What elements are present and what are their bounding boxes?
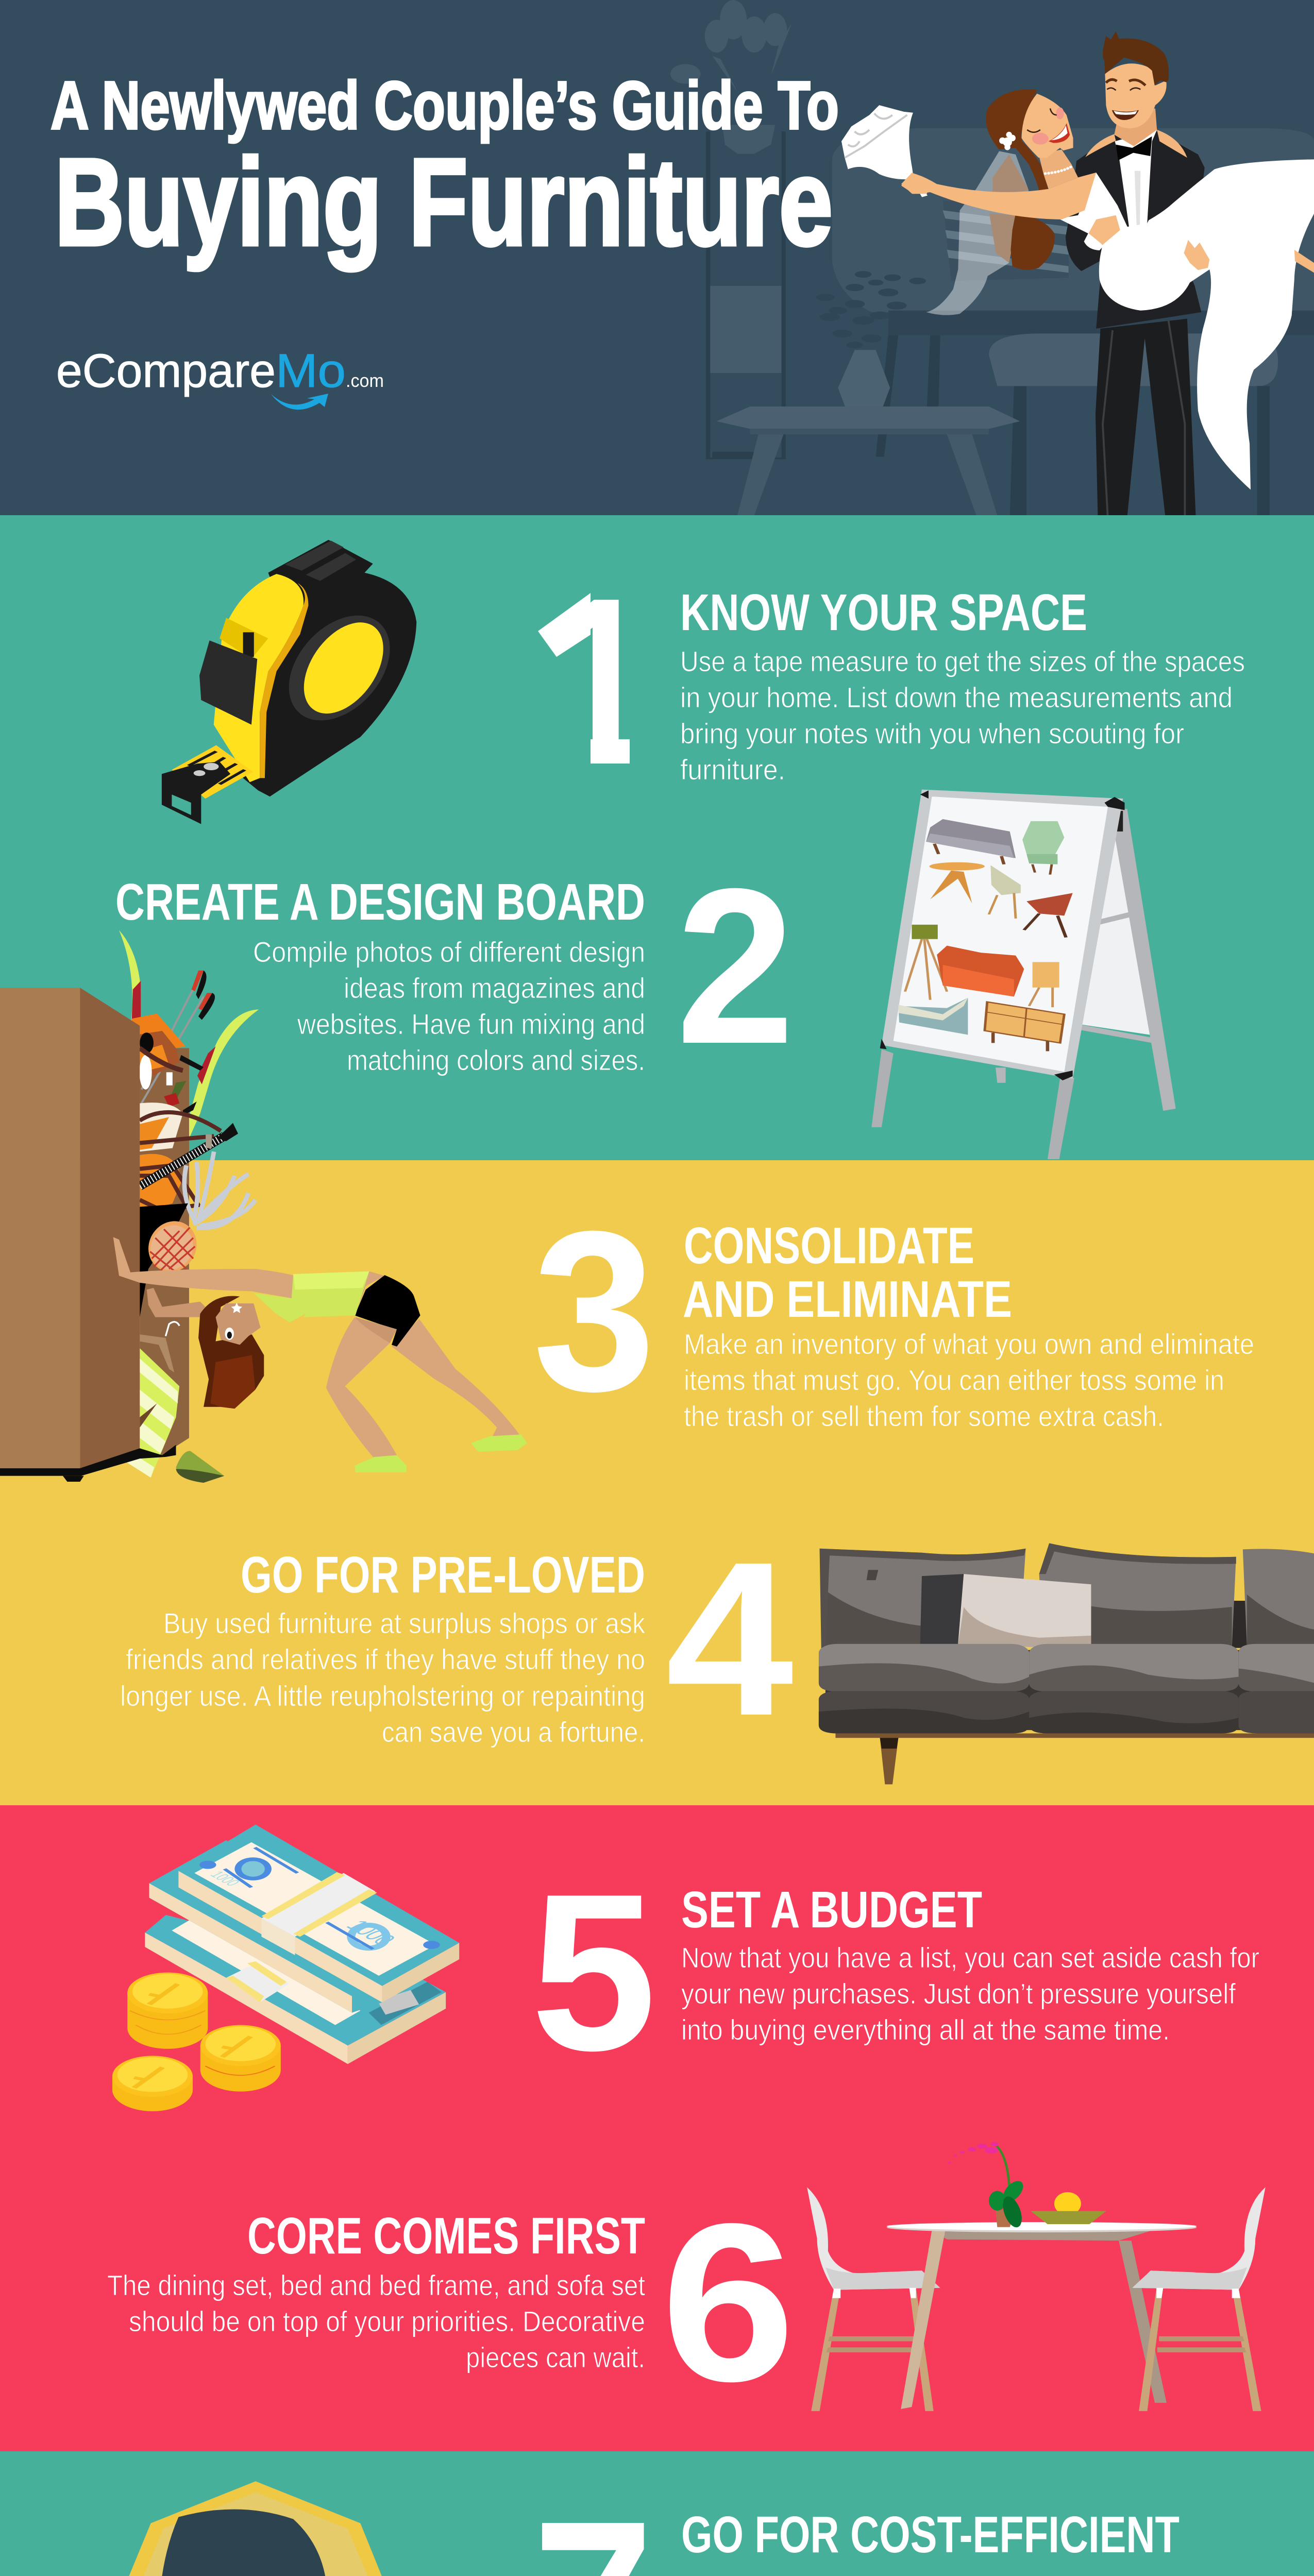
dress [1058,159,1314,489]
text: step 6 body: The dining set, bed and bed frame, and sofa set [107,2269,645,2301]
text: step 1 body: Use a tape measure to get the sizes of the spaces [680,645,1245,677]
heading: create a design board: CREATE A DESIGN BOARD [115,873,645,931]
illustration: faint living room background [670,0,1314,515]
logo: eCompareMo.com: Mo [276,345,346,397]
text: step 2 body: websites. Have fun mixing and [297,1008,645,1040]
text: step 1 body [680,645,1245,786]
bride face [1021,94,1073,158]
text: step 2 body: Compile photos of different design [253,936,645,968]
bride arm and neck [1039,149,1078,189]
panel: steps 1 and 2 [0,515,1314,1160]
wardrobe door [140,1048,189,1466]
heading: core comes first: CORE COMES FIRST [247,2207,645,2265]
number 2: 2 [676,843,795,1090]
text: step 4 body: longer use. A little reupholstering or repainting [120,1680,645,1712]
panel: steps 3 and 4 [0,1160,1314,1805]
bride arm over groom shoulder [1085,130,1187,158]
green shoe on floor [176,1451,224,1483]
logo: eCompareMo.com [56,345,384,410]
woman: shoes [355,1434,527,1472]
panel: header [0,0,1314,515]
panel: steps 7 and 8 [0,2451,1314,2576]
clutter: skis [119,930,259,1160]
illustration: design board [871,790,1176,1159]
shirt and bow tie [1115,130,1157,227]
text: step 5 body: into buying everything all at the same time. [681,2013,1170,2046]
panel: steps 5 and 6 [0,1805,1314,2451]
clutter: guitar [140,1123,238,1186]
clutter: clothing and racket [139,1204,206,1317]
text: step 4 body: can save you a fortune. [382,1716,645,1748]
icon: tape measure [162,540,416,824]
heading: know your space: KNOW YOUR SPACE [680,584,1087,641]
clutter: mop [184,1151,256,1228]
heading: go for pre-loved: GO FOR PRE-LOVED [241,1546,645,1604]
illustration: dining set [807,2142,1266,2411]
illustration: groom carrying bride [841,31,1314,515]
text: step 2 body: matching colors and sizes. [347,1044,645,1076]
heading: go for cost-efficient: GO FOR COST-EFFICIENT [681,2506,1180,2564]
wardrobe body [0,988,176,1482]
text: step 6 body: pieces can wait. [466,2341,645,2374]
groom hands and bride leg [1084,233,1104,250]
text: step 3 body: items that must go. You can either toss some in [684,1364,1224,1396]
clutter: ski poles [142,971,215,1103]
clutter: lower hanger [140,1334,174,1372]
text: step 2 body: ideas from magazines and [344,972,645,1004]
heading: consolidate and eliminate: AND ELIMINATE [683,1270,1012,1328]
text: step 1 body: bring your notes with you when scouting for [680,717,1184,750]
illustration: armchair on yellow octagon [107,2481,403,2576]
heading: consolidate and eliminate [683,1217,1012,1328]
groom trousers [1096,319,1195,515]
clutter: cuckoo clock and hangers [131,1013,221,1217]
title: line 2: Buying Furniture [55,133,833,271]
text: step 3 body: Make an inventory of what you own and eliminate [684,1328,1254,1360]
number 1: 1 [548,548,654,814]
text: step 1 body: in your home. List down the measurements and [680,681,1233,714]
illustration: cash stacks and coins: 1000 [206,1869,244,1888]
bouquet [841,105,914,179]
illustration: cash stacks and coins: 1000 [340,1917,401,1948]
text: step 4 body [120,1607,646,1748]
heading: set a budget: SET A BUDGET [681,1881,982,1939]
illustration: worn grey sofa [819,1543,1314,1784]
title: line 1: A Newlywed Couple’s Guide To [50,67,839,143]
number 3: 3 [533,1183,655,1438]
text: step 5 body [681,1941,1259,2046]
heading: consolidate and eliminate: CONSOLIDATE [684,1217,974,1275]
text: step 3 body: the trash or sell them for some extra cash. [684,1400,1164,1432]
groom head [1114,108,1157,146]
clutter: hanger hook [165,1322,179,1336]
text: step 6 body [107,2269,645,2374]
woman: legs [326,1317,521,1459]
woman: arms [113,1237,295,1317]
woman: midriff and shorts [355,1272,420,1347]
text: step 1 body: furniture. [680,753,785,786]
illustration: cash stacks and coins [112,1824,459,2111]
text: step 4 body: Buy used furniture at surplus shops or ask [163,1607,646,1639]
number 5: 5 [531,1847,656,2097]
text: step 6 body: should be on top of your priorities. Decorative [129,2305,645,2337]
groom jacket [1066,131,1205,329]
clutter: striped cloth [122,1348,179,1478]
bride hair [986,89,1049,197]
number 6: 6 [661,2176,795,2428]
veil [926,151,1029,315]
text: step 4 body: friends and relatives if they have stuff they no [126,1643,645,1675]
logo: eCompareMo.com: .com [346,370,384,391]
woman: hair and face [198,1296,264,1409]
text: step 2 body [253,936,645,1076]
woman: top [254,1272,369,1323]
logo: eCompareMo.com: eCompare [56,345,276,397]
illustration: overflowing wardrobe and woman holding it shut [0,930,527,1483]
text: step 3 body [684,1328,1254,1432]
number 4: 4 [666,1516,795,1761]
text: step 5 body: your new purchases. Just don’t pressure yourself [681,1977,1236,2010]
